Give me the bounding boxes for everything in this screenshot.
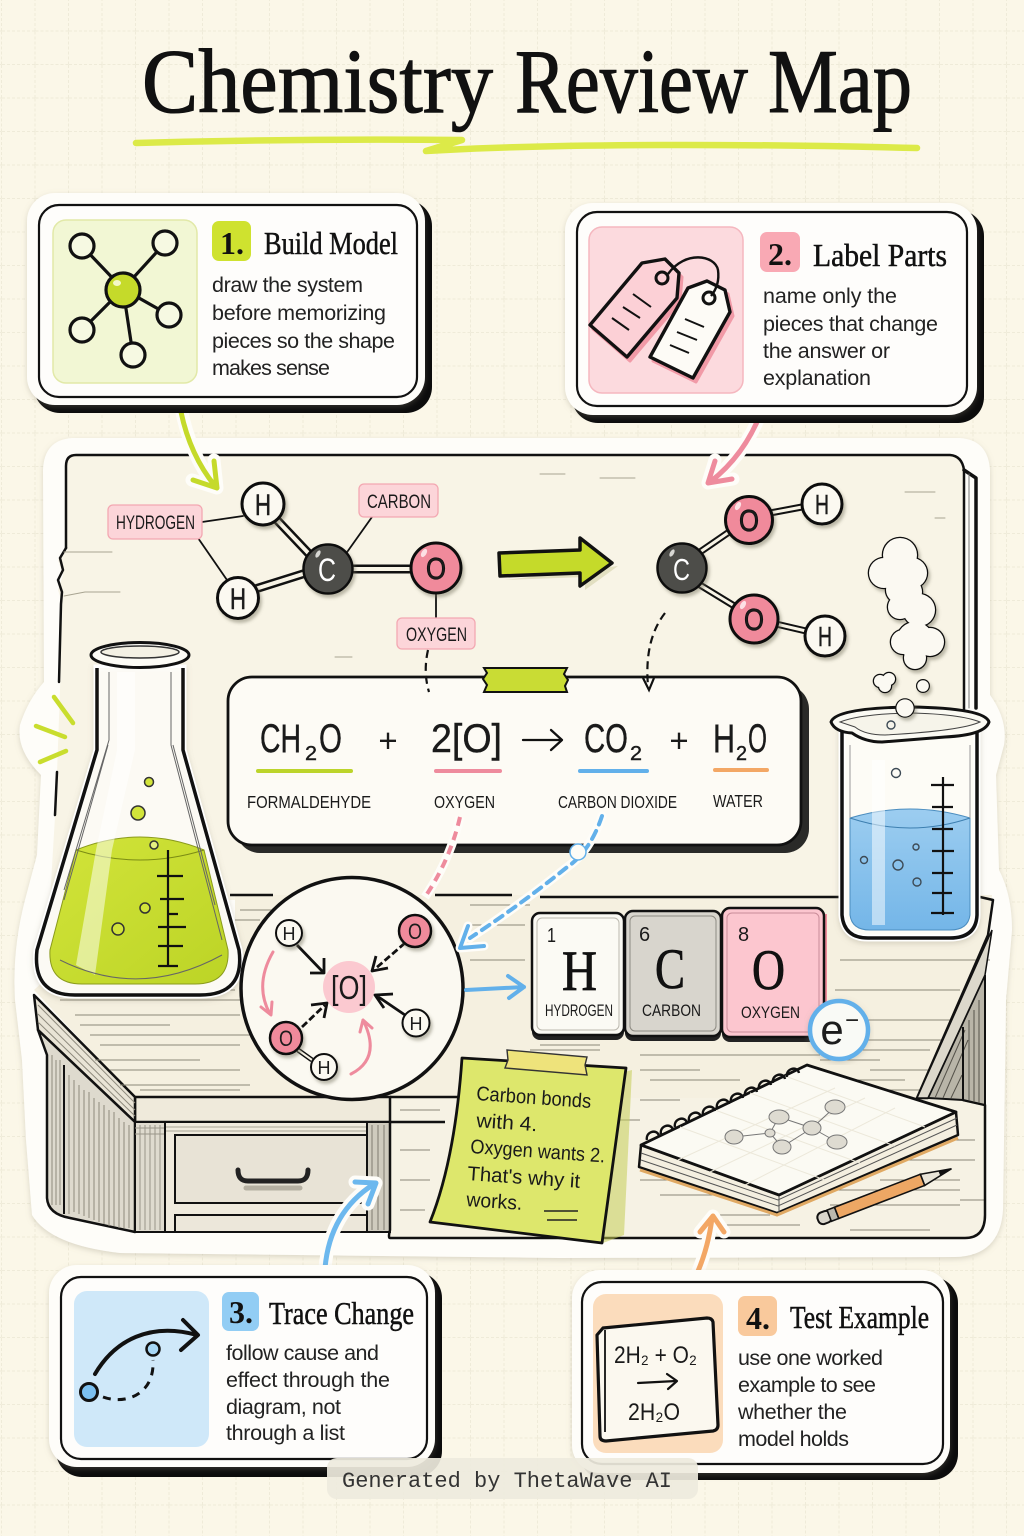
card text: use one worked: [738, 1346, 883, 1370]
compound labels: FORMALDEHYDE: [247, 792, 371, 812]
desk: [34, 895, 993, 1238]
desk left side panel: [38, 1030, 135, 1232]
compound labels: CARBON DIOXIDE: [558, 792, 677, 812]
card text: draw the system: [212, 273, 363, 297]
electron badge: −: [845, 1007, 859, 1034]
desk top edge: [230, 895, 993, 1238]
atom: H: [218, 578, 258, 618]
card text: pieces so the shape: [212, 329, 395, 353]
tile: oxygen: O: [752, 939, 785, 1002]
atom: O: O: [426, 551, 446, 586]
icon: worked example: 2H₂O: [628, 1399, 680, 1426]
label: carbon: [359, 484, 438, 517]
cycle arrows: [261, 952, 372, 1074]
arrow: card 2 to molecule: [708, 410, 762, 483]
atom: H: [402, 1010, 430, 1036]
card text: whether the: [737, 1400, 847, 1424]
compound labels: WATER: [713, 791, 763, 811]
tile: hydrogen: H: [562, 940, 597, 1003]
step badge: 1.: [220, 225, 244, 261]
desk leg and drawers: [135, 1122, 165, 1232]
atom: H: H: [815, 489, 829, 520]
atom: C: C: [673, 552, 690, 587]
reaction arrow: [523, 730, 562, 750]
card text: [212, 273, 395, 380]
title: Review: [515, 31, 748, 132]
tile: carbon: CARBON: [642, 1001, 701, 1020]
card text: name only the: [763, 284, 897, 308]
atom: H: H: [282, 924, 296, 944]
desk wood lines: [60, 905, 990, 1230]
desk right leg: [928, 975, 985, 1105]
atom: O: [726, 496, 772, 544]
arrow: circle to tiles: [466, 976, 524, 998]
panel: equation: [228, 668, 809, 853]
center atom: [323, 961, 375, 1013]
card text: diagram, not: [226, 1395, 341, 1419]
label: oxygen: OXYGEN: [406, 625, 467, 646]
note text: That's why it: [467, 1163, 581, 1193]
notebook spiral: [647, 1069, 799, 1140]
bubbles: [112, 778, 158, 935]
card text: the answer or: [763, 339, 890, 363]
card text: [737, 1346, 883, 1451]
step badge: 2.: [768, 236, 792, 272]
atom: H: H: [318, 1058, 330, 1078]
card text: model holds: [738, 1427, 849, 1451]
tile: oxygen: [722, 908, 827, 1042]
atom: H: H: [230, 583, 246, 616]
note text: works.: [465, 1189, 523, 1215]
title: Chemistry: [142, 31, 493, 132]
formula: CH2O: O: [319, 717, 342, 761]
atom: H: [805, 616, 845, 656]
arrow: card 3 to desk: [325, 1182, 376, 1268]
center atom: [O]: [331, 969, 367, 1006]
card title: Trace Change: [269, 1295, 414, 1331]
drawer handle: [238, 1170, 308, 1181]
formula: H2O: H: [713, 717, 735, 761]
icon: tags: [589, 227, 743, 393]
dashed link: pink: [425, 817, 460, 897]
card text: [763, 284, 938, 390]
card text: pieces that change: [763, 312, 938, 336]
drawer: [175, 1135, 367, 1203]
atom: H: H: [410, 1014, 422, 1034]
card 1: build model: [27, 193, 432, 413]
label: oxygen: [397, 618, 475, 649]
atom: O: [399, 915, 431, 947]
waypoint dot: [570, 844, 586, 860]
desk top surface: [34, 895, 992, 1098]
label: hydrogen: HYDROGEN: [116, 513, 195, 534]
notebook: [639, 1065, 958, 1215]
tile: hydrogen: HYDROGEN: [545, 1001, 613, 1020]
tile: hydrogen: [532, 913, 624, 1040]
atom: H: H: [818, 621, 832, 652]
compound labels: OXYGEN: [434, 792, 495, 812]
atom: H: [276, 920, 302, 946]
beaker water: [850, 809, 970, 930]
step badge: 3.: [229, 1294, 253, 1330]
atom: C: [304, 544, 352, 594]
tile: carbon: C: [655, 938, 685, 1001]
tile: carbon: [625, 911, 721, 1041]
card text: example to see: [738, 1373, 876, 1397]
arrow: reaction: [499, 538, 618, 590]
formula: CO2: CO: [584, 717, 628, 761]
card text: follow cause and: [226, 1341, 379, 1365]
sticker panel background: [14, 438, 1012, 1258]
plus: +: [378, 722, 398, 759]
compound labels: [247, 791, 763, 812]
card text: before memorizing: [212, 301, 386, 325]
card text: effect through the: [226, 1368, 390, 1392]
formula: CO2: 2: [630, 743, 642, 765]
label: hydrogen: [108, 505, 202, 539]
pencil: [816, 1163, 954, 1226]
beaker scale: [931, 777, 954, 915]
tile: carbon: 6: [639, 924, 650, 946]
atom: O: [730, 595, 778, 643]
tape: [483, 668, 568, 692]
note text: Carbon bonds: [476, 1083, 592, 1113]
watermark: [327, 1458, 698, 1499]
dashed link: oxygen label to equation: [426, 650, 429, 692]
formula: CH2O: CH: [260, 717, 301, 761]
atom: O: O: [739, 503, 759, 538]
title underline: [136, 140, 917, 151]
atom: H: [311, 1054, 337, 1080]
atom: O: [270, 1022, 302, 1054]
zoom circle: oxygen exchange: [241, 878, 463, 1100]
atom: O: [411, 543, 461, 593]
atom: H: [802, 484, 842, 524]
smoke: [868, 537, 945, 718]
note text: Oxygen wants 2.: [470, 1136, 606, 1167]
flask liquid: [50, 837, 228, 984]
icon: worked example: 2H₂ + O₂: [614, 1342, 697, 1369]
step badge: [738, 1296, 777, 1336]
icon: molecule model: [53, 220, 197, 383]
note tape: [505, 1050, 587, 1075]
atom: O: O: [744, 602, 764, 637]
flask scale: [157, 850, 186, 966]
arrow: card 4 to notebook: [695, 1216, 724, 1278]
card text: makes sense: [212, 356, 330, 380]
desk side band: [34, 995, 135, 1122]
formula: H2O: [713, 717, 767, 765]
note text: with 4.: [475, 1110, 538, 1136]
notebook molecule sketch: [725, 1100, 847, 1154]
atom: O: O: [408, 919, 422, 944]
label: carbon: CARBON: [367, 492, 431, 513]
icon: worked example: [593, 1294, 723, 1453]
icon: cause and effect path: [74, 1291, 209, 1447]
step badge: [212, 221, 251, 261]
arrow: card 1 to model: [181, 408, 217, 488]
card text: through a list: [226, 1421, 345, 1445]
card text: explanation: [763, 366, 871, 390]
beaker rim: [831, 707, 989, 742]
step badge: [222, 1292, 259, 1331]
element tiles: [532, 908, 827, 1042]
beaker bubbles: [860, 721, 921, 886]
flask rim: [91, 642, 189, 668]
atom: H: H: [255, 489, 271, 522]
step badge: 4.: [746, 1300, 770, 1336]
molecule: formaldehyde: [108, 483, 475, 649]
beaker: [831, 707, 989, 938]
card 2: label parts: [565, 203, 984, 423]
title: Map: [768, 31, 912, 132]
card 3: trace change: [49, 1265, 442, 1477]
molecule: products: [658, 484, 845, 656]
formula: H2O: O: [748, 717, 767, 761]
formula: CH2O: 2: [305, 743, 317, 765]
card text: [226, 1341, 390, 1445]
watermark: Generated by ThetaWave AI: [342, 1469, 672, 1494]
atom: H: [242, 483, 284, 525]
electron badge: [810, 1001, 868, 1059]
tile: oxygen: OXYGEN: [741, 1003, 800, 1022]
step badge: [760, 232, 800, 272]
formula: H2O: 2: [736, 743, 747, 765]
atom: C: C: [318, 552, 336, 588]
paper sheet: [50, 455, 966, 900]
plus: +: [669, 722, 689, 759]
tile: hydrogen: 1: [547, 925, 556, 947]
sticky note: [430, 1050, 632, 1243]
card title: Label Parts: [813, 237, 947, 273]
title: [142, 31, 912, 132]
spark lines: [36, 697, 73, 762]
note text: [465, 1083, 606, 1215]
bond O-H: [298, 1050, 312, 1060]
formula underlines: [258, 770, 767, 771]
formula: CH2O: [260, 717, 342, 765]
dashed link: products to equation: [643, 613, 665, 690]
desk front band: [135, 1097, 390, 1122]
tile: oxygen: 8: [738, 924, 749, 946]
formula: 2[O]: 2[O]: [431, 717, 502, 761]
bonds: [198, 516, 436, 618]
dashed arrow: blue: [460, 816, 602, 948]
paper outline: [55, 455, 976, 815]
flask: [36, 642, 240, 995]
bonds: [700, 507, 806, 631]
arrows to center: [297, 943, 405, 1027]
atom: C: [658, 544, 706, 592]
card 4: test example: [572, 1270, 958, 1480]
electron badge: e: [820, 1006, 844, 1053]
atom: O: O: [279, 1026, 293, 1051]
card title: Test Example: [790, 1299, 929, 1335]
card title: Build Model: [264, 225, 398, 261]
